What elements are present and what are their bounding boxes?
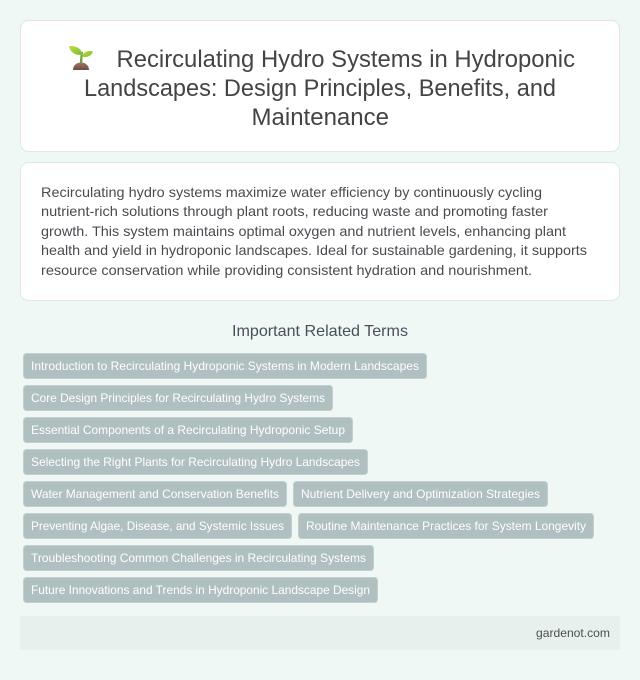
footer: gardenot.com [536,626,610,640]
icon: sprout [69,46,93,70]
title: Recirculating Hydro Systems in Hydroponic [116,46,575,73]
tag 8: Routine Maintenance Practices for System Longevity [306,519,586,533]
text block: description: resource conservation while providing consistent hydration and nourishment. [41,262,532,278]
tag 6: Nutrient Delivery and Optimization Strategies [301,487,540,501]
tag 9: Troubleshooting Common Challenges in Recirculating Systems [31,551,366,565]
tag 2: Core Design Principles for Recirculating Hydro Systems [31,391,325,405]
tag 2 [24,386,332,410]
text block: description: Recirculating hydro systems maximize water efficiency by continuously cycling [41,184,542,200]
tag 4 [24,450,368,474]
tag 9 [24,546,374,570]
tag 10: Future Innovations and Trends in Hydroponic Landscape Design [31,583,370,597]
text block: description: health and yield in hydroponic landscapes. Ideal for sustainable gardening, it supports [41,242,587,258]
tag 6 [294,482,548,506]
tag 1 [24,354,426,378]
tag 7 [24,514,292,538]
text block: description: nutrient-rich solutions through plant roots, reducing waste and promoting faster [41,203,548,219]
title: Maintenance [252,104,389,131]
panel: description card [20,162,620,300]
tag 3: Essential Components of a Recirculating Hydroponic Setup [31,423,345,437]
panel: title card [20,20,620,152]
title [84,46,575,131]
tag 5 [24,482,286,506]
heading: important related terms: Important Related Terms [232,323,408,340]
title: Landscapes: Design Principles, Benefits, and [84,75,556,102]
tag 4: Selecting the Right Plants for Recirculating Hydro Landscapes [31,455,360,469]
tag 3 [24,418,352,442]
text block: description [41,184,587,278]
tag 10 [24,578,378,602]
footer [20,616,620,650]
tag 8 [298,514,594,538]
panel: related term tags [24,354,594,602]
tag 1: Introduction to Recirculating Hydroponic Systems in Modern Landscapes [31,359,419,373]
tag 5: Water Management and Conservation Benefits [31,487,279,501]
text block: description: growth. This system maintains optimal oxygen and nutrient levels, enhancing plant [41,223,566,239]
tag 7: Preventing Algae, Disease, and Systemic Issues [31,519,284,533]
